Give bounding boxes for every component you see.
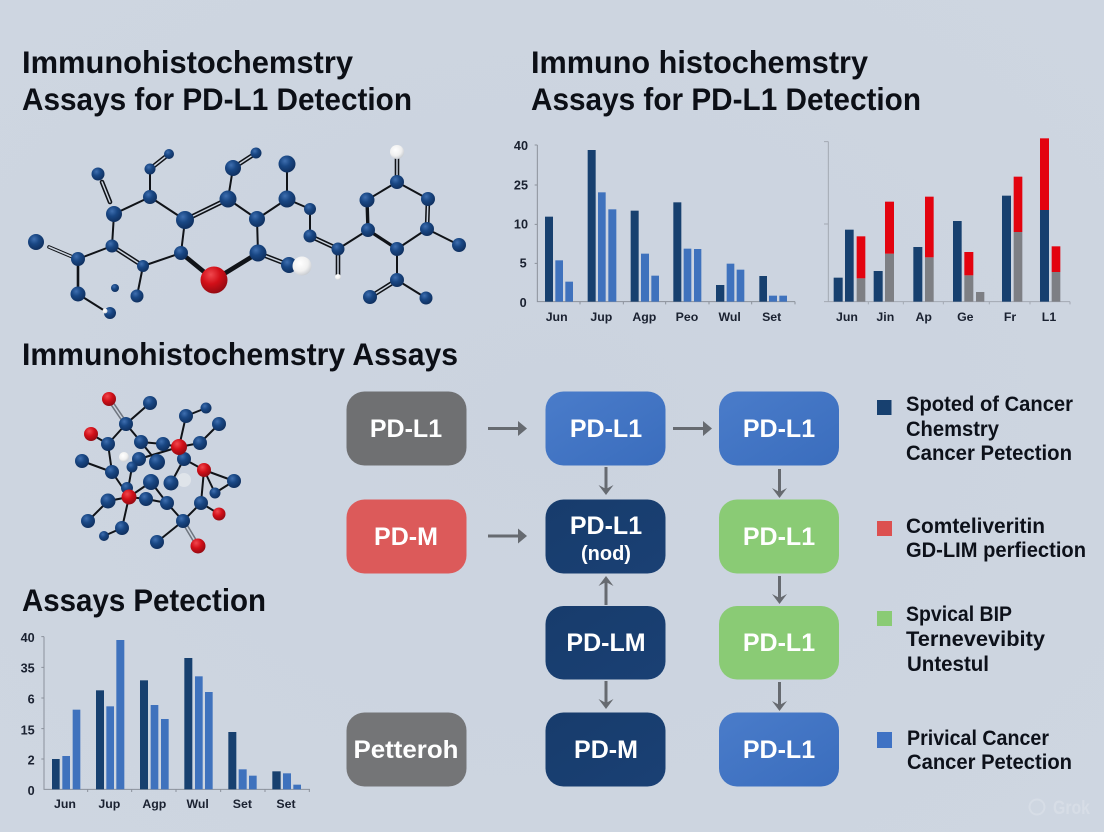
y axis labels: 40 xyxy=(514,139,528,153)
legend item: blue: Privical Cancer xyxy=(907,727,1049,750)
navy series xyxy=(545,150,767,302)
arrow: col 3 down 2 xyxy=(772,576,787,604)
box: grey PD-L1 xyxy=(346,392,466,466)
molecule diagram: large chain xyxy=(28,145,466,319)
watermark: Grok xyxy=(1030,798,1090,819)
legend item: red: Comteliveritin xyxy=(906,515,1045,538)
arrow: col 2 up to nod xyxy=(598,576,614,605)
chart axes xyxy=(41,637,310,792)
legend item: green: Spvical BIP xyxy=(906,603,1012,626)
y axis labels: 25 xyxy=(514,178,528,192)
title: top left xyxy=(22,44,412,117)
arrow: row 1 left xyxy=(488,421,527,436)
x axis labels: Ge xyxy=(957,310,974,324)
box: blue PD-L1 row 4 xyxy=(719,712,839,786)
legend item: blue xyxy=(877,727,1072,774)
title: top right: Immuno histochemstry xyxy=(531,44,868,80)
legend item: navy: Cancer Petection xyxy=(906,442,1072,465)
x axis labels: Peo xyxy=(676,310,699,324)
x axis labels xyxy=(836,310,1056,324)
box: navy PD-LM xyxy=(546,606,666,680)
x axis labels: Set xyxy=(233,797,252,811)
box: navy PD-L1 nod xyxy=(546,500,666,574)
blue series xyxy=(62,640,301,789)
x axis labels: Wul xyxy=(718,310,741,324)
molecule diagram: cluster xyxy=(75,392,241,554)
box: grey PD-L1: PD-L1 xyxy=(370,415,442,443)
arrow: row 2 left xyxy=(488,528,527,544)
legend item: red xyxy=(877,515,1086,562)
y axis labels: 2 xyxy=(28,754,35,768)
title: top left: Assays for PD-L1 Detection xyxy=(22,81,412,117)
box: green PD-L1 row 3: PD-L1 xyxy=(743,629,815,657)
x axis labels: Jun xyxy=(836,310,858,324)
blue series xyxy=(555,192,787,302)
arrow: col 2 down to nod xyxy=(598,467,614,495)
legend item: navy: Spoted of Cancer xyxy=(906,393,1073,416)
arrow: col 3 down 1 xyxy=(772,469,787,498)
x axis labels: Wul xyxy=(186,797,209,811)
box: blue PD-L1 row 1: PD-L1 xyxy=(570,415,642,443)
x axis labels: L1 xyxy=(1042,310,1056,324)
x axis labels: Ap xyxy=(915,310,932,324)
y axis labels: 35 xyxy=(21,662,35,676)
navy bars xyxy=(834,196,1049,302)
x axis labels: Jup xyxy=(98,797,121,811)
watermark: Grok: Grok xyxy=(1053,798,1090,819)
x axis labels: Set xyxy=(276,797,296,811)
box: red PD-M xyxy=(346,500,466,574)
y axis labels xyxy=(514,139,528,310)
box: blue PD-L1 row 1 right xyxy=(719,392,839,466)
box: blue PD-L1 row 4: PD-L1 xyxy=(743,736,815,764)
bar chart: bottom left xyxy=(21,631,310,811)
legend item: green: Untestul xyxy=(907,653,989,676)
y axis labels xyxy=(21,631,35,798)
title: top right: Assays for PD-L1 Detection xyxy=(531,81,921,117)
navy series xyxy=(52,658,281,789)
flow diagram xyxy=(346,392,839,786)
box: navy PD-M: PD-M xyxy=(574,736,638,764)
chart axes xyxy=(824,142,1070,304)
legend item: green xyxy=(877,603,1045,676)
box: navy PD-L1 nod: PD-L1 xyxy=(570,512,642,540)
bar chart: top middle xyxy=(514,139,795,324)
x axis labels: Jun xyxy=(546,310,568,324)
grey bars xyxy=(857,232,1060,302)
x axis labels xyxy=(54,797,296,811)
x axis labels: Fr xyxy=(1004,310,1016,324)
y axis labels: 6 xyxy=(28,692,35,706)
arrow: col 2 down to PD-M xyxy=(598,681,614,709)
box: blue PD-L1 row 1 right: PD-L1 xyxy=(743,415,815,443)
y axis labels: 0 xyxy=(28,784,35,798)
box: navy PD-L1 nod: (nod) xyxy=(581,543,631,565)
legend xyxy=(877,393,1086,774)
legend item: navy xyxy=(877,393,1073,465)
legend item: navy: Chemstry xyxy=(906,418,999,441)
y axis labels: 15 xyxy=(21,723,35,737)
heading: middle: Immunohistochemstry Assays xyxy=(22,336,458,372)
chart axes xyxy=(535,145,795,304)
heading: bottom left: Assays Petection xyxy=(22,582,266,618)
box: navy PD-M xyxy=(546,712,666,786)
legend item: blue: Cancer Petection xyxy=(907,751,1072,774)
red bars xyxy=(857,138,1060,278)
x axis labels: Set xyxy=(762,310,781,324)
arrow: row 1 right xyxy=(673,421,712,436)
x axis labels: Agp xyxy=(142,797,167,811)
box: green PD-L1 row 2 xyxy=(719,500,839,574)
box: navy PD-LM: PD-LM xyxy=(566,629,646,657)
box: red PD-M: PD-M xyxy=(374,523,438,551)
y axis labels: 40 xyxy=(21,631,35,645)
x axis labels: Jin xyxy=(876,310,894,324)
legend item: red: GD-LIM perfiection xyxy=(906,539,1086,562)
x axis labels xyxy=(546,310,781,324)
box: grey Petteroh: Petteroh xyxy=(354,736,458,764)
legend item: green: Ternevevibity xyxy=(906,628,1045,651)
x axis labels: Jup xyxy=(590,310,613,324)
x axis labels: Jun xyxy=(54,797,76,811)
arrow: col 3 down 3 xyxy=(772,682,787,711)
box: blue PD-L1 row 1 xyxy=(546,392,666,466)
y axis labels: 5 xyxy=(520,257,527,271)
box: green PD-L1 row 2: PD-L1 xyxy=(743,523,815,551)
title: top left: Immunohistochemstry xyxy=(22,44,353,80)
stacked bar chart: top right xyxy=(824,138,1070,324)
y axis labels: 0 xyxy=(520,296,527,310)
x axis labels: Agp xyxy=(632,310,657,324)
box: green PD-L1 row 3 xyxy=(719,606,839,680)
title: top right xyxy=(531,44,921,117)
box: grey Petteroh xyxy=(346,712,466,786)
y axis labels: 10 xyxy=(514,218,528,232)
